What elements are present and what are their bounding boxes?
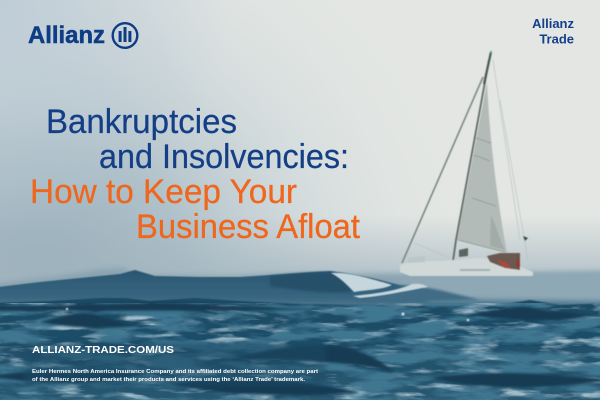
mast light bbox=[490, 51, 492, 53]
mast bbox=[453, 60, 489, 261]
dark wave under foam bbox=[270, 272, 352, 293]
forestay bbox=[402, 77, 483, 263]
breaking wave foam bbox=[66, 273, 469, 321]
sea bbox=[0, 270, 600, 400]
logo: Allianz bbox=[28, 22, 137, 49]
legal disclaimer: Euler Hermes North America Insurance Company and its affiliated debt collection company are part bbox=[32, 369, 318, 375]
website url: ALLIANZ-TRADE.COM/US bbox=[32, 344, 174, 356]
distant haze waves bbox=[0, 268, 600, 300]
title bbox=[30, 103, 361, 246]
title: Business Afloat bbox=[136, 208, 361, 246]
flag bbox=[523, 236, 528, 241]
dark wave crests bbox=[0, 303, 600, 395]
brand: Allianz Trade: Allianz bbox=[532, 16, 574, 31]
brand: Allianz Trade: Trade bbox=[539, 32, 574, 46]
sailboat bbox=[400, 51, 533, 276]
misty band right bbox=[395, 272, 600, 302]
logo emblem bbox=[113, 23, 137, 48]
brand: Allianz Trade bbox=[532, 16, 574, 46]
logo wordmark: Allianz bbox=[28, 22, 105, 49]
jib sail bbox=[457, 82, 507, 253]
rigging bbox=[414, 60, 528, 260]
legal disclaimer bbox=[32, 369, 318, 383]
title: and Insolvencies: bbox=[99, 138, 349, 176]
title: How to Keep Your bbox=[30, 173, 297, 211]
wave texture bbox=[0, 303, 600, 400]
back swell bbox=[0, 270, 600, 320]
main sea body bbox=[0, 298, 600, 400]
title: Bankruptcies bbox=[46, 103, 237, 141]
swell behind foam bbox=[360, 286, 480, 302]
hull bbox=[400, 258, 533, 276]
crew bbox=[487, 253, 520, 270]
shade behind footer text bbox=[24, 342, 326, 386]
legal disclaimer: of the Allianz group and market their products and services using the ‘Allianz Trade’ trademark. bbox=[32, 377, 305, 383]
